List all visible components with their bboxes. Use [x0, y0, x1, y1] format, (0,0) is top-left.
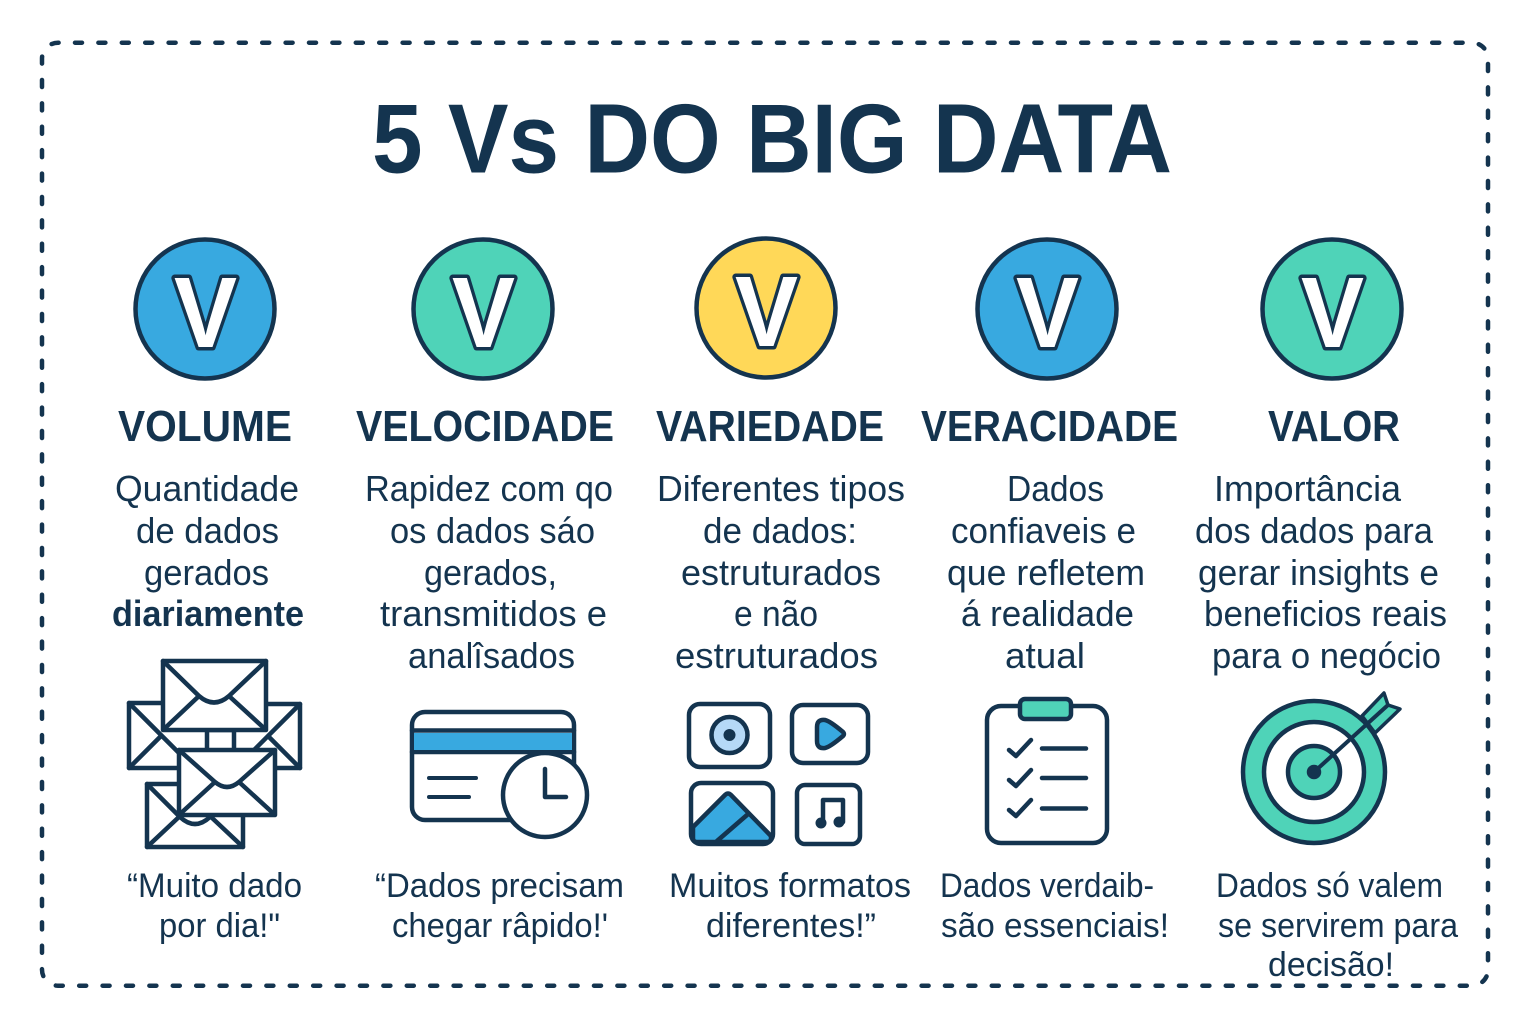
caption: veracidade: [940, 867, 1169, 945]
icon: V badge valor: [1262, 240, 1402, 378]
icon: V badge variedade: V: [735, 256, 798, 368]
heading: volume: VOLUME: [118, 403, 292, 451]
description: variedade: estruturados: [681, 552, 881, 593]
icon: card with clock: [412, 712, 587, 837]
description: volume: [112, 468, 304, 634]
caption: valor: Dados só valem: [1216, 867, 1443, 905]
caption: valor: se servirem para: [1218, 907, 1459, 945]
icon: V badge velocidade: V: [452, 257, 515, 369]
description: veracidade: que refletem: [947, 552, 1145, 593]
panel: veracidade: [921, 240, 1178, 945]
icon: V badge velocidade: [414, 240, 552, 378]
description: variedade: Diferentes tipos: [657, 468, 905, 509]
description: veracidade: á realidade: [961, 593, 1134, 634]
icon: V badge volume: [136, 240, 274, 378]
description: volume: Quantidade: [115, 468, 299, 509]
panel: velocidade: [356, 240, 624, 945]
caption: variedade: Muitos formatos: [669, 867, 911, 905]
description: velocidade: transmitidos e: [380, 593, 607, 634]
description: valor: gerar insights e: [1198, 552, 1439, 593]
icon: V badge volume: V: [174, 257, 237, 369]
icon: V badge variedade: [696, 238, 836, 378]
heading: velocidade: VELOCIDADE: [356, 403, 614, 451]
description: variedade: estruturados: [675, 635, 878, 676]
icon: target with arrow: [1243, 693, 1400, 843]
description: valor: [1195, 468, 1447, 676]
panel: variedade: [656, 238, 911, 945]
caption: velocidade: chegar râpido!': [392, 907, 608, 945]
description: variedade: e não: [734, 593, 818, 634]
description: veracidade: atual: [1005, 635, 1085, 676]
heading: valor: VALOR: [1268, 403, 1400, 451]
caption: variedade: diferentes!”: [706, 907, 876, 945]
description: velocidade: Rapidez com qo: [365, 468, 613, 509]
icon: V badge valor: V: [1301, 257, 1364, 369]
caption: volume: “Muito dado: [127, 867, 302, 905]
icon: V badge veracidade: [978, 240, 1116, 378]
description: valor: Importância: [1214, 468, 1402, 509]
heading: variedade: VARIEDADE: [656, 403, 884, 451]
icon: clipboard checklist: [987, 699, 1107, 843]
caption: velocidade: [375, 867, 624, 945]
caption: volume: [127, 867, 302, 945]
caption: veracidade: Dados verdaib-: [940, 867, 1154, 905]
description: veracidade: [947, 468, 1145, 676]
description: valor: dos dados para: [1195, 510, 1434, 551]
description: velocidade: gerados,: [424, 552, 557, 593]
icon: envelopes: [129, 661, 300, 847]
description: veracidade: confiaveis e: [951, 510, 1136, 551]
description: variedade: de dados:: [703, 510, 857, 551]
description: velocidade: [365, 468, 613, 676]
description: velocidade: analîsados: [408, 635, 575, 676]
description: volume: de dados: [136, 510, 279, 551]
panel: volume: [112, 240, 304, 945]
description: volume: diariamente: [112, 593, 304, 634]
caption: valor: decisão!: [1268, 946, 1394, 984]
description: valor: para o negócio: [1212, 635, 1441, 676]
description: valor: beneficios reais: [1204, 593, 1447, 634]
description: veracidade: Dados: [1007, 468, 1104, 509]
panel: valor: [1195, 240, 1459, 984]
title: 5 Vs DO BIG DATA: [372, 84, 1172, 194]
icon: media formats: [689, 704, 868, 844]
caption: velocidade: “Dados precisam: [375, 867, 624, 905]
caption: variedade: [669, 867, 911, 945]
heading: veracidade: VERACIDADE: [921, 403, 1178, 451]
icon: V badge veracidade: V: [1016, 257, 1079, 369]
description: velocidade: os dados sáo: [390, 510, 595, 551]
description: variedade: [657, 468, 905, 676]
caption: veracidade: são essenciais!: [941, 907, 1169, 945]
caption: valor: [1216, 867, 1459, 984]
description: volume: gerados: [144, 552, 269, 593]
caption: volume: por dia!": [159, 907, 280, 945]
